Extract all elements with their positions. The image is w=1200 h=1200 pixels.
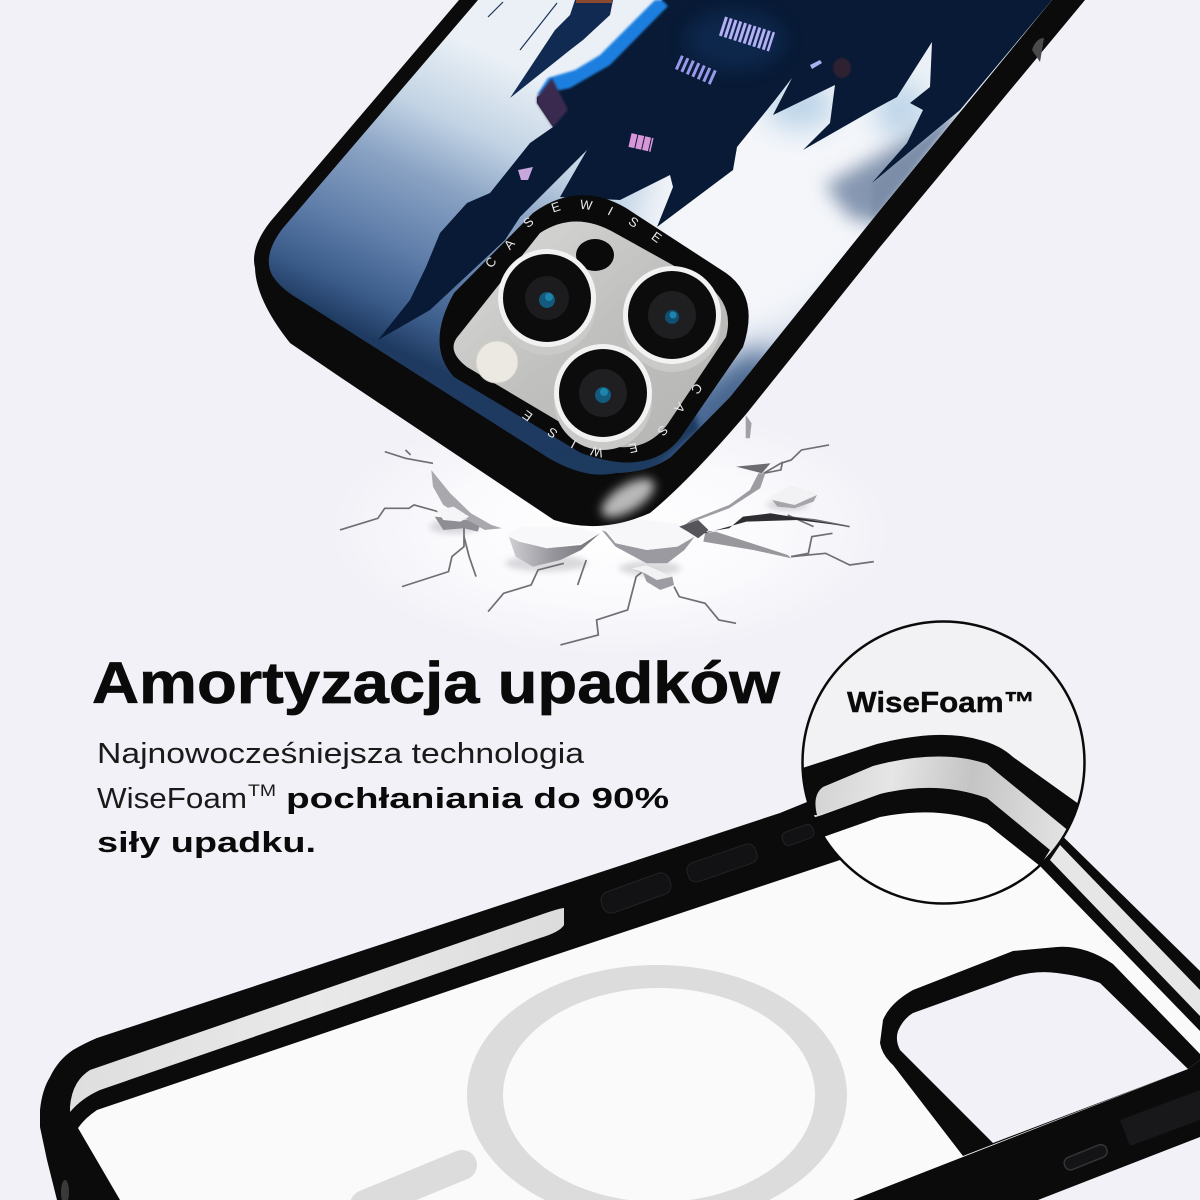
small rock right xyxy=(770,485,817,508)
inner glow xyxy=(685,10,785,70)
camera cutout frame xyxy=(880,947,1200,1156)
crack shadows xyxy=(679,520,709,538)
WiseFoam magnified callout xyxy=(801,620,1086,905)
CASEWISE brand, bottom: A xyxy=(671,400,688,416)
CASEWISE brand, top: W xyxy=(579,197,594,213)
magnifier disc xyxy=(802,622,1084,904)
trademark: TM xyxy=(248,781,276,800)
clear back panel xyxy=(78,813,1200,1200)
heading: Amortyzacja upadków xyxy=(92,651,781,716)
raised plate rim, left xyxy=(431,470,502,530)
right foam gap xyxy=(1050,845,1200,1016)
crack halo xyxy=(330,405,890,655)
rock chunk centre-right xyxy=(602,519,695,563)
case frame xyxy=(40,750,1200,1200)
magnified frame detail xyxy=(804,734,1078,902)
lens right xyxy=(623,266,721,372)
magnified outer band xyxy=(804,734,1078,829)
lit window small xyxy=(518,167,533,180)
mist right xyxy=(620,115,942,394)
magnified foam gap xyxy=(814,756,1066,852)
magsafe ring xyxy=(467,965,847,1200)
rock chunk centre-left xyxy=(507,527,600,567)
crack wedge xyxy=(703,532,791,558)
bump frame xyxy=(440,195,749,462)
action button xyxy=(781,823,815,847)
magnified interior xyxy=(826,812,1038,902)
crack impact on surface xyxy=(330,405,890,655)
right dark tower accent xyxy=(833,58,851,78)
rock chunk left xyxy=(435,507,479,532)
round tower rim xyxy=(537,78,568,127)
volume button one xyxy=(598,870,674,916)
camera bump xyxy=(440,195,749,462)
CASEWISE brand, top: S xyxy=(520,214,537,231)
clear phone case xyxy=(40,750,1200,1200)
fortress silhouette xyxy=(378,0,1052,340)
WiseFoam label: WiseFoam™ xyxy=(847,687,1035,719)
raised plate rim, right xyxy=(684,473,765,525)
magnified inner band xyxy=(814,788,1050,865)
CASEWISE brand, bottom: W xyxy=(589,443,604,461)
crack lines xyxy=(340,445,874,645)
pale blue lobes xyxy=(580,80,925,202)
sky xyxy=(268,0,1052,475)
lit window far right xyxy=(810,60,822,69)
CASEWISE brand, top: E xyxy=(649,229,665,246)
dark blue lower right xyxy=(700,332,774,426)
dark blue base xyxy=(548,413,702,475)
grey region right xyxy=(872,110,960,218)
CASEWISE brand, bottom: E xyxy=(519,407,535,424)
lens bottom xyxy=(554,344,652,450)
dark wedge xyxy=(736,463,770,473)
vertical shard xyxy=(746,415,752,438)
CASEWISE brand, bottom: E xyxy=(627,440,639,456)
CASEWISE brand, bottom: C xyxy=(688,380,706,397)
side button xyxy=(1032,38,1044,62)
CASEWISE brand, top: C xyxy=(482,254,499,271)
phone in case xyxy=(240,0,1085,526)
description line 2 regular: WiseFoam xyxy=(97,783,247,815)
CASEWISE brand, top: S xyxy=(626,213,642,231)
speaker slot xyxy=(1062,1143,1109,1172)
case highlight xyxy=(596,471,660,525)
description line 3 bold: siły upadku. xyxy=(97,827,316,859)
small rock under centre xyxy=(631,565,674,590)
magnifier outline xyxy=(802,622,1084,904)
carbon texture patch xyxy=(1120,1090,1200,1146)
description line 1: Najnowocześniejsza technologia xyxy=(97,738,585,770)
camera cutout xyxy=(897,972,1188,1143)
camera plate xyxy=(454,222,728,447)
flash xyxy=(476,341,518,383)
spire tower left xyxy=(510,0,613,98)
microphone hole xyxy=(576,239,614,271)
lit windows middle xyxy=(678,62,714,78)
lens top-left xyxy=(498,249,596,355)
volume button two xyxy=(685,842,759,884)
crack shading xyxy=(430,499,808,576)
left foam gap xyxy=(70,908,564,1112)
smoke right xyxy=(825,110,960,225)
CASEWISE brand, bottom: I xyxy=(568,436,579,451)
bottom port xyxy=(61,1180,69,1200)
side buttons xyxy=(598,823,1109,1172)
CASEWISE brand, top xyxy=(482,197,665,271)
description line 2 bold: pochłaniania do 90% xyxy=(286,783,669,815)
case body xyxy=(254,0,1085,526)
CASEWISE brand, bottom: S xyxy=(544,424,560,442)
CASEWISE brand, top: A xyxy=(501,236,518,252)
thin spires xyxy=(488,2,557,50)
blue glow edge xyxy=(537,0,668,95)
CASEWISE brand, bottom: S xyxy=(654,422,671,439)
magsafe alignment pill xyxy=(365,1165,462,1200)
lit window pink xyxy=(630,140,652,145)
crack drawing xyxy=(340,415,874,645)
deep crack xyxy=(698,513,850,533)
CASEWISE brand, bottom xyxy=(519,380,706,461)
orange top xyxy=(576,0,612,3)
screen artwork xyxy=(268,0,1052,475)
lit windows top xyxy=(722,26,772,42)
CASEWISE brand, top: E xyxy=(549,198,562,215)
description text xyxy=(97,738,669,859)
CASEWISE brand, top: I xyxy=(605,204,616,219)
